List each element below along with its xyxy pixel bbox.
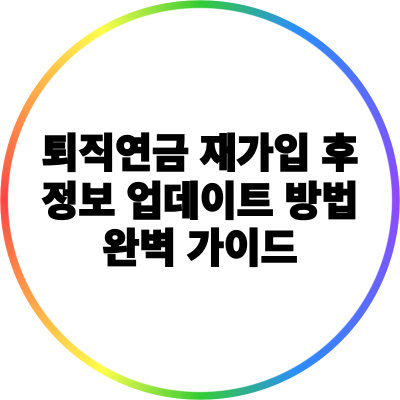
title: 퇴직연금 재가입 후 (42, 132, 358, 176)
title: 완벽 가이드 (102, 227, 298, 271)
title (42, 132, 358, 271)
title: 정보 업데이트 방법 (42, 180, 358, 224)
